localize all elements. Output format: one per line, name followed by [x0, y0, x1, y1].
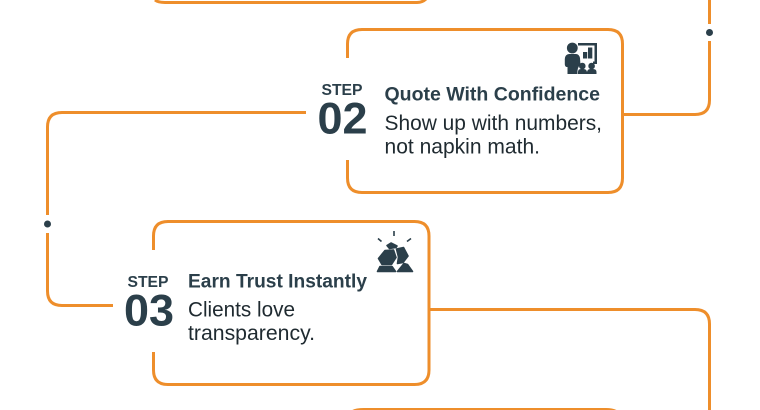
step label: 03: STEP [128, 274, 168, 291]
connector: step 01 to step 02 [622, 0, 710, 114]
step 01 card bottom edge [155, 0, 427, 2]
panel: step 02 [318, 30, 622, 192]
connector dot: right [706, 29, 713, 36]
step label: 02: STEP [322, 82, 362, 99]
step number: 03: 03 [124, 286, 174, 336]
icon: presenter with chart board [565, 43, 597, 74]
text: step 02 description: Show up with numbers, [384, 112, 602, 135]
card outline: step 02 [348, 30, 622, 192]
connector: step 03 to step 04 [430, 310, 710, 410]
heading: Earn Trust Instantly: Earn Trust Instantly [188, 270, 367, 292]
step 04 card top edge [352, 410, 617, 411]
text: step 03 description: Clients love [188, 298, 295, 322]
icon: rocks with impact rays [378, 231, 412, 272]
text: step 02 description: not napkin math. [384, 136, 540, 158]
step number: 02: 02 [318, 94, 368, 144]
text: step 03 description: transparency. [188, 322, 315, 345]
panel: step 03 [124, 222, 429, 384]
connector: step 02 to step 03 [48, 112, 306, 306]
connector dot: left [44, 220, 51, 228]
card outline: step 03 [154, 222, 429, 384]
heading: Quote With Confidence: Quote With Confidence [384, 84, 600, 106]
